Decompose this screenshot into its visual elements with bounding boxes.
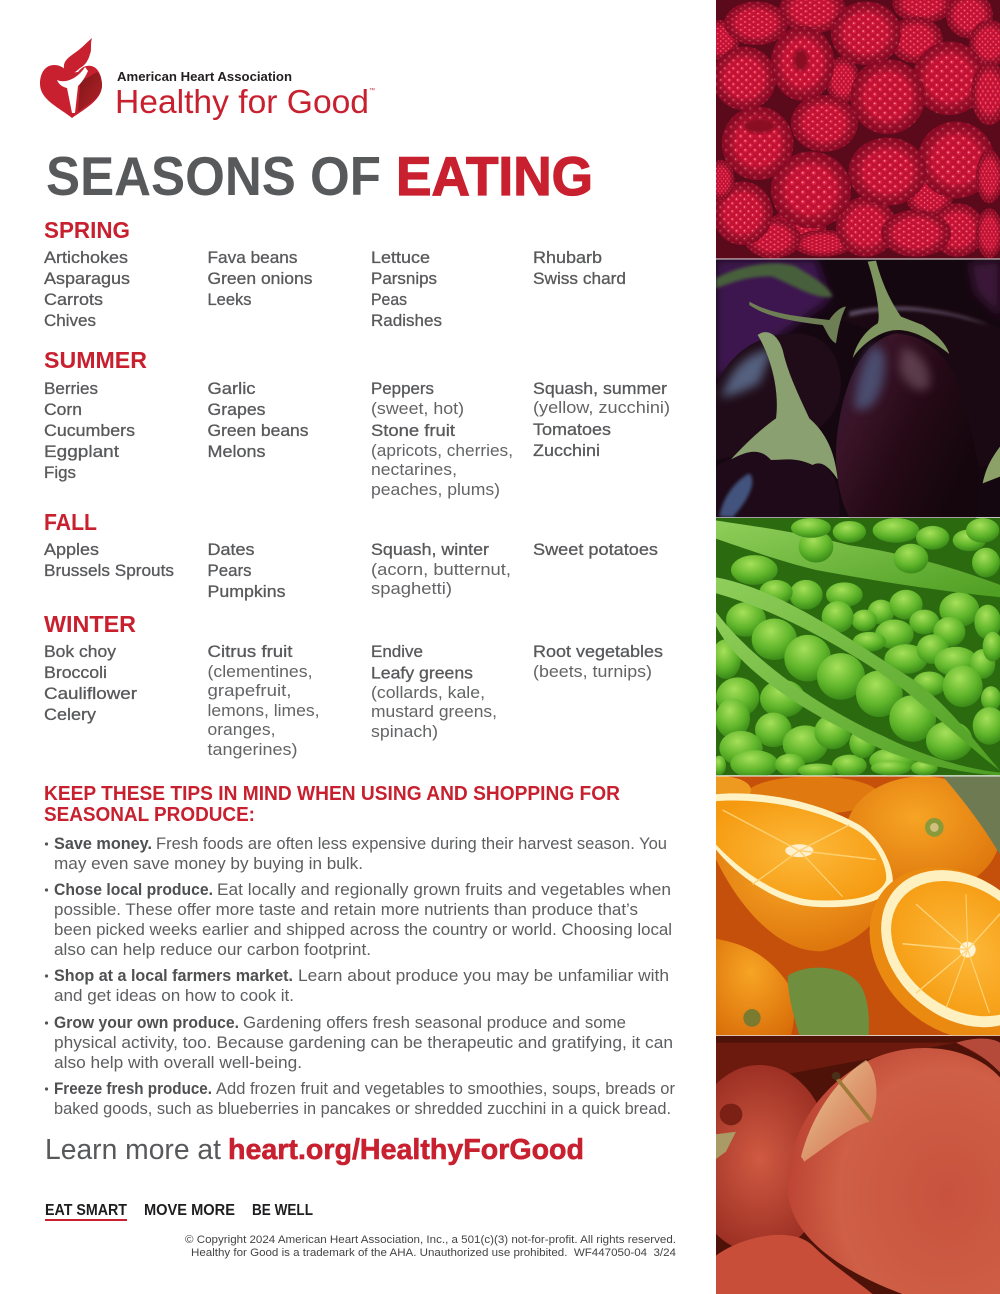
list: summer column 4: Tomatoes — [533, 420, 611, 439]
tip: local produce: Eat locally and regionally grown fruits and vegetables when — [217, 881, 671, 899]
list: winter column 3: (collards, kale, — [371, 683, 485, 702]
main stem and calyx — [853, 261, 949, 358]
call to action: learn more: Learn more at — [45, 1134, 221, 1166]
list: summer column 1: Cucumbers — [44, 421, 135, 440]
list: summer column 2: Grapes — [208, 400, 266, 419]
tip: grow your own: also help with overall well-being. — [54, 1054, 302, 1072]
list: spring column 2: Leeks — [208, 290, 252, 309]
left apple — [716, 1065, 817, 1246]
list: winter column 1: Celery — [44, 705, 97, 724]
tip: farmers market: Shop at a local farmers market. — [54, 967, 293, 985]
front left eggplant — [716, 449, 840, 517]
front left stem and calyx — [731, 332, 838, 479]
list: spring column 2 — [208, 248, 312, 309]
list: spring column 3: Parsnips — [371, 269, 437, 288]
list: summer column 3: (sweet, hot) — [371, 399, 464, 418]
list: spring column 1: Artichokes — [44, 248, 128, 267]
copyright: Healthy for Good is a trademark of the AHA. Unauthorized use prohibited. WF447050-04 3/24 — [191, 1247, 676, 1259]
tip: freeze produce: Add frozen fruit and vegetables to smoothies, soups, breads or — [216, 1080, 675, 1098]
list: winter column 1 — [44, 642, 137, 724]
list: winter column 2: (clementines, — [208, 662, 312, 681]
tip: local produce: been picked weeks earlier and shipped across the country or world. Choosing local — [54, 921, 672, 939]
tip: grow your own: physical activity, too. Because gardening can be therapeutic and gratifying, it can — [54, 1034, 673, 1052]
list: fall column 1 — [44, 540, 174, 580]
list: winter column 1: Cauliflower — [44, 684, 137, 703]
text block: tips list — [45, 835, 675, 1118]
tip: save money: may even save money by buying in bulk. — [54, 855, 363, 873]
copyright — [185, 1234, 676, 1259]
list: spring column 4 — [533, 248, 626, 288]
call to action: learn more: heart.org/HealthyForGood — [228, 1134, 584, 1166]
right calyx hint — [983, 447, 1000, 483]
list: summer column 2: Melons — [208, 442, 266, 461]
left half orange — [716, 850, 878, 952]
list: summer column 3: Peppers — [371, 379, 434, 398]
tip: freeze produce: Freeze fresh produce. — [54, 1080, 212, 1098]
list: winter column 3: Endive — [371, 642, 423, 661]
tip: save money — [45, 835, 667, 873]
list: fall column 1: Apples — [44, 540, 99, 559]
list: fall column 3: Squash, winter — [371, 540, 489, 559]
footer tagline: BE WELL — [252, 1202, 313, 1219]
bottom leaf — [788, 968, 869, 1035]
footer tagline — [45, 1202, 313, 1221]
list: summer column 3: (apricots, cherries, — [371, 441, 513, 460]
list: summer column 2: Green beans — [208, 421, 308, 440]
list: spring column 3: Lettuce — [371, 248, 430, 267]
list: winter column 2: grapefruit, — [208, 681, 292, 700]
tip: grow your own — [45, 1014, 673, 1072]
back eggplant — [839, 305, 1000, 467]
heading: summer: SUMMER — [44, 347, 147, 373]
list: winter column 3: mustard greens, — [371, 702, 497, 721]
list: fall column 3: (acorn, butternut, — [371, 560, 511, 579]
list: fall column 2 — [208, 540, 286, 601]
list: summer column 4: (yellow, zucchini) — [533, 398, 670, 417]
call to action: learn more — [45, 1134, 584, 1166]
list: fall column 2: Pumpkins — [208, 582, 286, 601]
list: winter column 3 — [371, 642, 497, 741]
trademark: ™ — [369, 87, 375, 94]
tip: freeze produce: baked goods, such as blueberries in pancakes or shredded zucchini in a quick bread. — [54, 1100, 671, 1118]
list: winter column 2: Citrus fruit — [208, 642, 293, 661]
list: summer column 2: Garlic — [208, 379, 256, 398]
list: fall column 3: spaghetti) — [371, 579, 452, 598]
list: fall column 2: Dates — [208, 540, 254, 559]
panel: winter — [44, 611, 663, 759]
title — [46, 145, 593, 207]
list: fall column 2: Pears — [208, 561, 252, 580]
list: summer column 4: Squash, summer — [533, 379, 667, 398]
top pod — [716, 520, 1000, 597]
list: summer column 4 — [533, 379, 670, 460]
footer tagline: EAT SMART — [45, 1202, 127, 1219]
photo: eggplants — [716, 259, 1000, 517]
panel: summer — [44, 347, 670, 499]
list: summer column 2 — [208, 379, 308, 461]
list: winter column 2 — [208, 642, 320, 759]
main eggplant — [836, 333, 979, 517]
whole orange top right — [848, 776, 998, 882]
panel: fall — [44, 509, 658, 601]
tip: save money: Save money. — [54, 835, 152, 853]
title: SEASONS OF — [46, 145, 381, 207]
upper half of pod — [716, 577, 1000, 770]
heading: winter: WINTER — [44, 611, 136, 637]
copyright: © Copyright 2024 American Heart Association, Inc., a 501(c)(3) not-for-profit. All rights reserved. — [185, 1234, 676, 1246]
list: winter column 2: oranges, — [208, 720, 276, 739]
tip: local produce: Chose local produce. — [54, 881, 213, 899]
list: summer column 1: Berries — [44, 379, 98, 398]
list: summer column 1: Eggplant — [44, 442, 119, 461]
photo: oranges — [716, 776, 1000, 1036]
list: winter column 3: spinach) — [371, 722, 438, 741]
middle left eggplant — [716, 333, 841, 460]
list: summer column 3 — [371, 379, 513, 499]
list: summer column 3: peaches, plums) — [371, 480, 500, 499]
list: winter column 3: Leafy greens — [371, 664, 473, 682]
lower half of pod — [716, 612, 1000, 775]
tip: local produce: also can help reduce our carbon footprint. — [54, 941, 371, 959]
list: spring column 2: Green onions — [208, 269, 312, 288]
list: spring column 1: Chives — [44, 311, 96, 330]
list: winter column 4 — [533, 642, 663, 681]
wordmark: Healthy for Good: Healthy for Good — [115, 83, 369, 120]
tip: farmers market: and get ideas on how to cook it. — [54, 987, 294, 1005]
top oranges — [746, 776, 879, 814]
list: winter column 4: (beets, turnips) — [533, 662, 652, 681]
heading: tips: KEEP THESE TIPS IN MIND WHEN USING AND SHOPPING FOR — [44, 783, 621, 805]
tip: local produce: possible. These offer more taste and retain more nutrients than produce that’s — [54, 901, 638, 919]
list: summer column 1 — [44, 379, 135, 482]
purple cloth background — [716, 259, 829, 380]
apple stem — [835, 1076, 870, 1119]
list: spring column 4: Swiss chard — [533, 269, 626, 288]
heading: tips: SEASONAL PRODUCE: — [44, 804, 255, 826]
main apple — [788, 1048, 1000, 1294]
heading: spring: SPRING — [44, 217, 130, 243]
list: spring column 3: Peas — [371, 290, 407, 309]
bottom apple — [716, 1235, 873, 1294]
list: winter column 2: lemons, limes, — [208, 701, 320, 720]
list: winter column 1: Bok choy — [44, 642, 117, 661]
list: summer column 3: Stone fruit — [371, 421, 455, 440]
list: summer column 1: Figs — [44, 463, 76, 482]
list: winter column 4: Root vegetables — [533, 642, 663, 661]
tip: grow your own: Gardening offers fresh seasonal produce and some — [243, 1014, 626, 1032]
list: winter column 2: tangerines) — [208, 740, 298, 759]
list: spring column 1: Asparagus — [44, 269, 130, 288]
heading: tips — [44, 783, 621, 826]
tip: save money: Fresh foods are often less expensive during their harvest season. You — [156, 835, 667, 853]
photo: raspberries — [699, 0, 1000, 259]
list: spring column 3: Radishes — [371, 311, 442, 330]
logo: American Heart Association Healthy for Good — [40, 38, 375, 120]
tip: local produce — [45, 881, 672, 959]
photo: peas — [711, 518, 1000, 778]
leaf top right — [943, 776, 1000, 855]
list: summer column 1: Corn — [44, 400, 82, 419]
title: EATING — [396, 145, 593, 207]
panel: spring — [44, 217, 626, 330]
tip: farmers market — [45, 967, 669, 1005]
list: spring column 2: Fava beans — [208, 248, 298, 267]
tip: farmers market: Learn about produce you may be unfamiliar with — [298, 967, 669, 985]
icon: heart and torch — [40, 38, 102, 118]
right half orange — [870, 869, 1000, 1036]
list: spring column 1: Carrots — [44, 290, 103, 309]
list: winter column 1: Broccoli — [44, 663, 107, 682]
list: spring column 3 — [371, 248, 442, 330]
footer tagline: MOVE MORE — [144, 1202, 235, 1219]
list: fall column 4: Sweet potatoes — [533, 540, 658, 559]
tip: grow your own: Grow your own produce. — [54, 1014, 239, 1032]
list: summer column 4: Zucchini — [533, 441, 600, 460]
list: fall column 3 — [371, 540, 511, 598]
heading: fall: FALL — [44, 509, 97, 535]
bottom left orange — [716, 939, 794, 1035]
photo: apples — [688, 1036, 1000, 1294]
list: spring column 4: Rhubarb — [533, 248, 602, 267]
tip: freeze produce — [45, 1080, 675, 1118]
list: summer column 3: nectarines, — [371, 460, 457, 479]
wordmark: American Heart Association: American Heart Association — [117, 69, 292, 84]
list: spring column 1 — [44, 248, 130, 330]
list: fall column 1: Brussels Sprouts — [44, 561, 174, 580]
